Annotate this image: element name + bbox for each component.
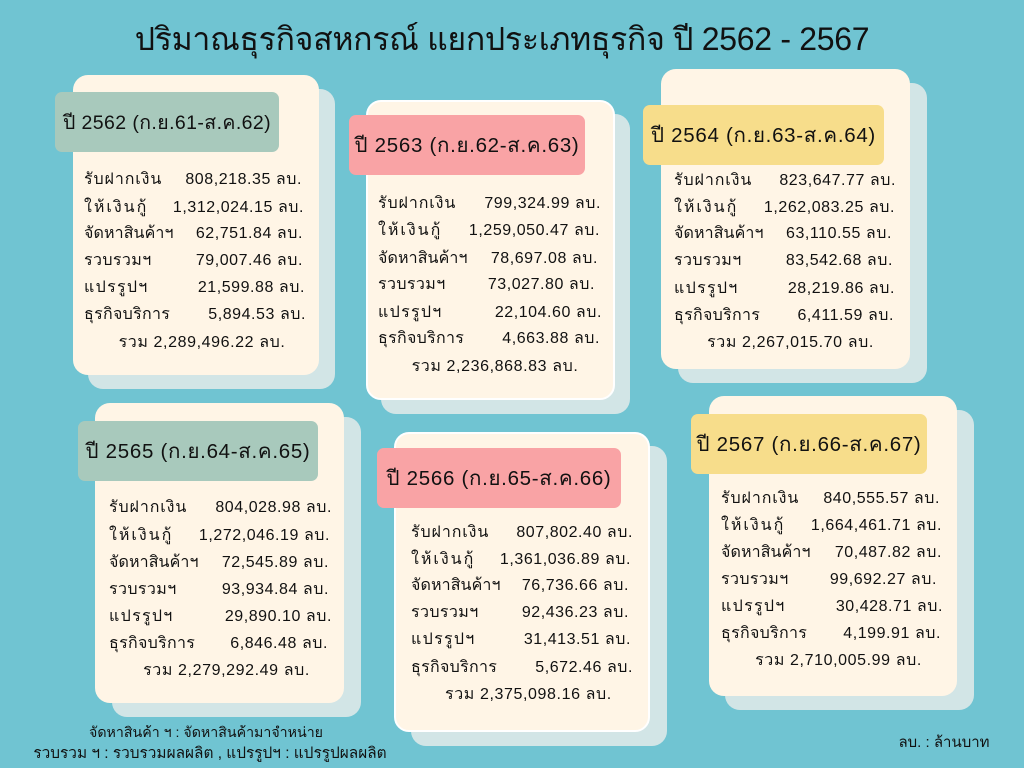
text: loans: ให้เงินกู้ [721, 517, 785, 534]
text: total: รวม 2,375,098.16 ลบ. [445, 686, 612, 703]
text: deposits: รับฝากเงิน [109, 499, 187, 516]
text: collection: 93,934.84 ลบ. [222, 581, 329, 598]
text: processing [378, 304, 602, 322]
text: deposits: รับฝากเงิน [378, 195, 456, 212]
heading: year 2566: ปี 2566 (ก.ย.65-ส.ค.66) [387, 467, 611, 490]
text: services: 6,846.48 ลบ. [230, 635, 328, 652]
text: collection: รวบรวมฯ [674, 252, 742, 269]
text: deposits: 799,324.99 ลบ. [484, 195, 601, 212]
text: deposits [721, 490, 940, 507]
footnote: unit: ลบ. : ล้านบาท [898, 734, 990, 751]
text: procurement [674, 224, 892, 242]
text: services [674, 307, 894, 324]
text: services: ธุรกิจบริการ [84, 306, 170, 323]
heading: year 2563 [349, 115, 585, 175]
text: deposits: รับฝากเงิน [674, 172, 752, 189]
text: loans: 1,262,083.25 ลบ. [764, 199, 895, 216]
text: services: 4,199.91 ลบ. [843, 625, 941, 642]
text: loans [674, 198, 895, 216]
text: collection [109, 581, 329, 598]
text: collection [378, 276, 595, 293]
text: processing [84, 279, 305, 296]
text: procurement: จัดหาสินค้าฯ [84, 225, 174, 242]
text: services: ธุรกิจบริการ [378, 330, 464, 347]
text: processing: แปรรูปฯ [721, 598, 786, 615]
text: processing [721, 595, 943, 617]
text: services: 4,663.88 ลบ. [502, 330, 600, 347]
text: procurement [109, 554, 329, 571]
text: loans [411, 550, 631, 568]
text: loans [721, 516, 942, 534]
text: loans [109, 526, 330, 544]
text: collection: รวบรวมฯ [721, 571, 789, 588]
text: loans: ให้เงินกู้ [378, 222, 442, 239]
title: ปริมาณธุรกิจสหกรณ์ แยกประเภทธุรกิจ ปี 2562 - 2567 [135, 21, 869, 57]
text: procurement: 63,110.55 ลบ. [786, 225, 892, 242]
text: processing: แปรรูปฯ [109, 608, 174, 625]
heading: year 2564 [643, 105, 884, 165]
text: collection: รวบรวมฯ [411, 604, 479, 621]
text: deposits [84, 171, 302, 188]
text: loans: 1,664,461.71 ลบ. [811, 517, 942, 534]
panel: year 2567 [691, 396, 974, 710]
text: processing: แปรรูปฯ [411, 631, 476, 648]
text: collection: 92,436.23 ลบ. [522, 604, 629, 621]
text: procurement [721, 544, 942, 561]
text: services [109, 635, 328, 652]
text: collection: 73,027.80 ลบ. [488, 276, 595, 293]
panel: year 2563 [349, 100, 630, 414]
heading: year 2565: ปี 2565 (ก.ย.64-ส.ค.65) [86, 440, 310, 463]
text: processing: 30,428.71 ลบ. [836, 598, 943, 615]
text: deposits: 840,555.57 ลบ. [823, 490, 940, 507]
heading: year 2563: ปี 2563 (ก.ย.62-ส.ค.63) [355, 134, 579, 157]
text: services: ธุรกิจบริการ [411, 659, 497, 676]
text: procurement: จัดหาสินค้าฯ [674, 225, 764, 242]
heading: year 2564: ปี 2564 (ก.ย.63-ส.ค.64) [651, 124, 876, 147]
text: processing: แปรรูปฯ [674, 280, 739, 297]
text: processing [411, 631, 631, 648]
text: procurement: 72,545.89 ลบ. [222, 554, 329, 571]
text: deposits: รับฝากเงิน [721, 490, 799, 507]
text: processing: 31,413.51 ลบ. [524, 631, 631, 648]
panel: year 2564 [643, 69, 927, 383]
text: total: รวม 2,710,005.99 ลบ. [755, 652, 922, 669]
text: total: รวม 2,289,496.22 ลบ. [119, 334, 285, 351]
text: procurement: 78,697.08 ลบ. [491, 250, 598, 267]
text: deposits: รับฝากเงิน [411, 524, 489, 541]
text: loans: ให้เงินกู้ [109, 527, 173, 544]
text: deposits: 808,218.35 ลบ. [185, 171, 302, 188]
text: procurement: 76,736.66 ลบ. [522, 577, 629, 594]
panel: year 2565 [78, 403, 361, 717]
text: procurement [411, 576, 629, 594]
heading: year 2567 [691, 414, 927, 474]
text: services: 6,411.59 ลบ. [797, 307, 894, 324]
text: deposits [109, 499, 332, 516]
text: collection: รวบรวมฯ [109, 581, 177, 598]
text: loans: ให้เงินกู้ [84, 199, 148, 216]
text: collection: 99,692.27 ลบ. [830, 571, 937, 588]
text: procurement: 70,487.82 ลบ. [835, 544, 942, 561]
text: collection: 83,542.68 ลบ. [786, 252, 893, 269]
text: collection [411, 604, 629, 621]
text: loans: 1,312,024.15 ลบ. [173, 199, 304, 216]
text: processing [109, 608, 332, 626]
text: deposits [674, 172, 896, 189]
text: procurement [378, 250, 598, 267]
text: deposits: 823,647.77 ลบ. [779, 172, 896, 189]
text: deposits [411, 524, 633, 541]
panel: year 2566 [377, 432, 667, 746]
text: deposits: 804,028.98 ลบ. [215, 499, 332, 516]
text: services: ธุรกิจบริการ [721, 625, 807, 642]
text: services: 5,672.46 ลบ. [535, 659, 633, 676]
text: loans [378, 220, 600, 240]
text: collection: รวบรวมฯ [84, 252, 152, 269]
text: procurement: จัดหาสินค้าฯ [411, 577, 501, 594]
text: collection: 79,007.46 ลบ. [196, 252, 303, 269]
text: loans [84, 198, 304, 216]
text: services [411, 659, 633, 676]
text: services: ธุรกิจบริการ [109, 635, 195, 652]
text: loans: 1,272,046.19 ลบ. [199, 527, 330, 544]
text: collection [84, 252, 303, 269]
text: loans: ให้เงินกู้ [411, 551, 475, 568]
heading: year 2562: ปี 2562 (ก.ย.61-ส.ค.62) [63, 112, 271, 134]
text: processing: 22,104.60 ลบ. [495, 304, 602, 321]
text: services: 5,894.53 ลบ. [208, 306, 306, 323]
text: deposits [378, 195, 601, 212]
heading: year 2565 [78, 421, 318, 481]
text: services: ธุรกิจบริการ [674, 307, 760, 324]
text: procurement: จัดหาสินค้าฯ [721, 544, 811, 561]
heading: year 2562 [55, 92, 279, 152]
footnote: collection and processing abbreviations: รวบรวม ฯ : รวบรวมผลผลิต , แปรรูปฯ : แปรรูปผลผลิต [33, 745, 387, 762]
text: processing: 29,890.10 ลบ. [225, 608, 332, 625]
text: loans: ให้เงินกู้ [674, 199, 738, 216]
text: loans: 1,361,036.89 ลบ. [500, 551, 631, 568]
text: deposits: 807,802.40 ลบ. [516, 524, 633, 541]
text: total: รวม 2,279,292.49 ลบ. [143, 662, 310, 679]
text: collection [721, 571, 937, 588]
text: loans: 1,259,050.47 ลบ. [469, 222, 600, 239]
text: collection [674, 252, 893, 269]
text: total: รวม 2,267,015.70 ลบ. [707, 334, 874, 351]
text: collection: รวบรวมฯ [378, 276, 446, 293]
text: processing: แปรรูปฯ [84, 279, 149, 296]
text: total: รวม 2,236,868.83 ลบ. [412, 358, 578, 375]
text: services [84, 306, 306, 324]
text: procurement: 62,751.84 ลบ. [196, 225, 303, 242]
text: processing: 28,219.86 ลบ. [788, 280, 895, 297]
text: deposits: รับฝากเงิน [84, 171, 162, 188]
text: processing: 21,599.88 ลบ. [198, 279, 305, 296]
text: processing: แปรรูปฯ [378, 304, 443, 321]
panel: year 2562 [55, 75, 335, 389]
heading: year 2566 [377, 448, 621, 508]
footnote: procurement abbreviation: จัดหาสินค้า ฯ : จัดหาสินค้ามาจำหน่าย [89, 725, 323, 741]
text: procurement: จัดหาสินค้าฯ [109, 554, 199, 571]
text: services [378, 330, 600, 348]
text: services [721, 622, 941, 644]
text: procurement: จัดหาสินค้าฯ [378, 250, 468, 267]
text: procurement [84, 224, 303, 242]
heading: year 2567: ปี 2567 (ก.ย.66-ส.ค.67) [697, 433, 921, 456]
text: processing [674, 280, 895, 298]
